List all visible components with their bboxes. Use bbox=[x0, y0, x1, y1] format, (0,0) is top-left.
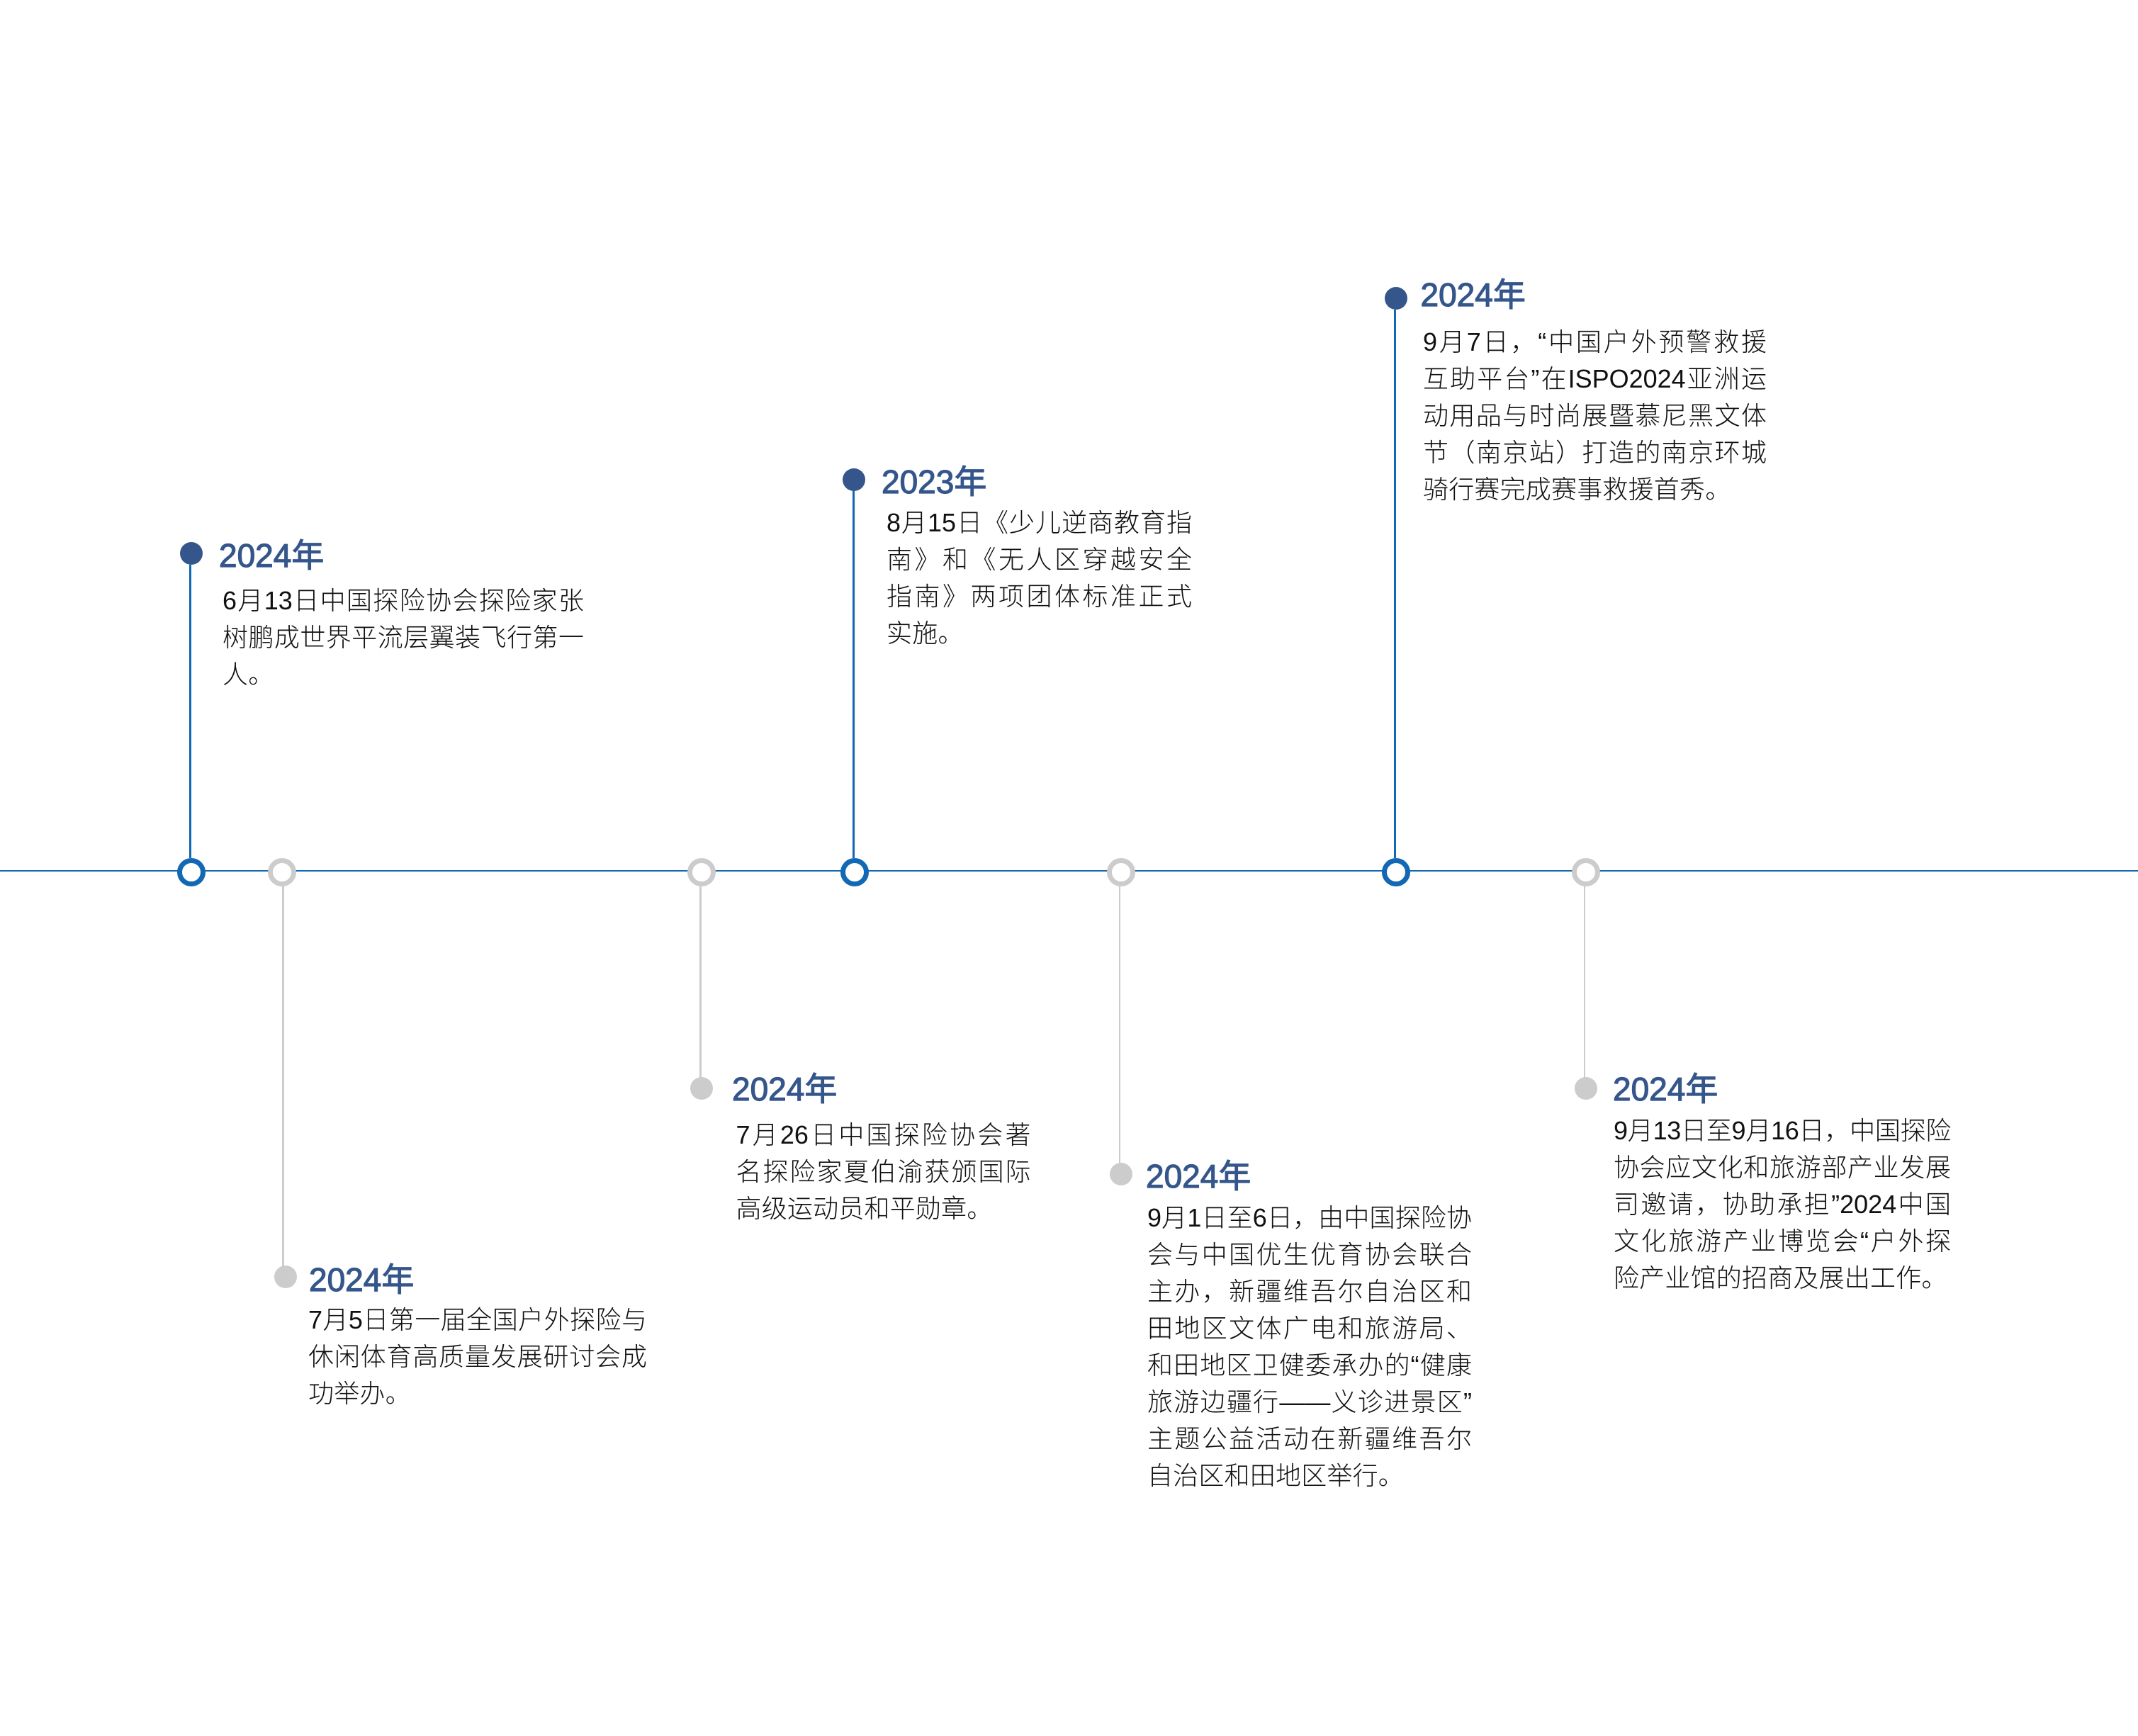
description text: 树鹏成世界平流层翼装飞行第一 bbox=[223, 623, 584, 652]
axis ring bbox=[687, 858, 716, 886]
description text bbox=[308, 1305, 647, 1408]
description text: 田地区文体广电和旅游局、 bbox=[1147, 1314, 1472, 1343]
description text: 7月5日第一届全国户外探险与 bbox=[308, 1305, 647, 1334]
year heading: 2024年 bbox=[309, 1261, 414, 1298]
connector stem bbox=[853, 489, 855, 858]
description text: 8月15日《少儿逆商教育指 bbox=[887, 508, 1192, 537]
description text: 协会应文化和旅游部产业发展 bbox=[1614, 1153, 1951, 1182]
description text bbox=[1147, 1203, 1472, 1490]
milestone: 9月1日至6日 bbox=[1107, 858, 1472, 1490]
description text: 骑行赛完成赛事救援首秀。 bbox=[1423, 475, 1731, 504]
milestone: 7月5日 bbox=[268, 858, 647, 1408]
description text: 实施。 bbox=[887, 619, 964, 648]
marker dot bbox=[274, 1266, 296, 1288]
connector stem bbox=[1583, 884, 1585, 1081]
description text: 南》和《无人区穿越安全 bbox=[887, 545, 1192, 574]
year heading: 2024年 bbox=[219, 537, 324, 574]
axis ring bbox=[840, 858, 869, 886]
milestone: 6月13日 bbox=[177, 537, 584, 886]
description text: 6月13日中国探险协会探险家张 bbox=[223, 586, 584, 615]
description text bbox=[1423, 327, 1767, 504]
year heading: 2024年 bbox=[1420, 276, 1526, 313]
description text: 自治区和田地区举行。 bbox=[1147, 1461, 1404, 1490]
description text: 人。 bbox=[223, 660, 274, 689]
description text: 互助平台”在ISPO2024亚洲运 bbox=[1423, 364, 1767, 393]
description text bbox=[1614, 1116, 1951, 1292]
milestone: 8月15日 bbox=[840, 463, 1192, 886]
axis ring bbox=[1382, 858, 1410, 886]
description text bbox=[736, 1120, 1030, 1223]
marker dot bbox=[180, 542, 203, 565]
description text bbox=[223, 586, 584, 689]
description text: 9月7日，“中国户外预警救援 bbox=[1423, 327, 1767, 356]
description text: 休闲体育高质量发展研讨会成 bbox=[308, 1342, 647, 1371]
description text: 会与中国优生优育协会联合 bbox=[1147, 1240, 1472, 1269]
timeline axis bbox=[0, 870, 2138, 872]
milestone: 9月7日 bbox=[1382, 276, 1767, 886]
description text: 7月26日中国探险协会著 bbox=[736, 1120, 1030, 1149]
description text: 司邀请，协助承担”2024中国 bbox=[1614, 1190, 1951, 1219]
marker dot bbox=[1575, 1077, 1597, 1100]
axis ring bbox=[268, 858, 296, 886]
year heading: 2024年 bbox=[1613, 1071, 1718, 1107]
marker dot bbox=[690, 1077, 713, 1100]
description text: 高级运动员和平勋章。 bbox=[736, 1194, 993, 1223]
description text bbox=[887, 508, 1192, 648]
description text: 9月13日至9月16日，中国探险 bbox=[1614, 1116, 1951, 1145]
description text: 动用品与时尚展暨慕尼黑文体 bbox=[1423, 401, 1767, 430]
marker dot bbox=[1110, 1163, 1132, 1185]
axis ring bbox=[1572, 858, 1600, 886]
marker dot bbox=[1385, 287, 1407, 310]
connector stem bbox=[1118, 884, 1120, 1166]
description text: 9月1日至6日，由中国探险协 bbox=[1147, 1203, 1472, 1232]
description text: 主题公益活动在新疆维吾尔 bbox=[1147, 1424, 1472, 1453]
milestone: 9月13日至9月16日 bbox=[1572, 858, 1951, 1292]
connector stem bbox=[699, 884, 702, 1081]
description text: 主办，新疆维吾尔自治区和 bbox=[1147, 1277, 1472, 1306]
year heading: 2023年 bbox=[882, 463, 986, 500]
description text: 指南》两项团体标准正式 bbox=[887, 582, 1192, 611]
marker dot bbox=[842, 468, 865, 491]
description text: 名探险家夏伯渝获颁国际 bbox=[736, 1157, 1030, 1186]
axis ring bbox=[177, 858, 206, 886]
description text: 旅游边疆行——义诊进景区” bbox=[1147, 1387, 1472, 1416]
description text: 和田地区卫健委承办的“健康 bbox=[1147, 1351, 1472, 1380]
description text: 功举办。 bbox=[308, 1379, 411, 1408]
year heading: 2024年 bbox=[1146, 1158, 1251, 1195]
milestone: 7月26日 bbox=[687, 858, 1030, 1223]
description text: 节（南京站）打造的南京环城 bbox=[1423, 438, 1767, 467]
connector stem bbox=[189, 565, 191, 858]
description text: 文化旅游产业博览会“户外探 bbox=[1614, 1227, 1951, 1256]
axis ring bbox=[1107, 858, 1135, 886]
connector stem bbox=[1394, 310, 1396, 858]
description text: 险产业馆的招商及展出工作。 bbox=[1614, 1263, 1947, 1292]
year heading: 2024年 bbox=[732, 1071, 837, 1107]
connector stem bbox=[282, 884, 283, 1268]
